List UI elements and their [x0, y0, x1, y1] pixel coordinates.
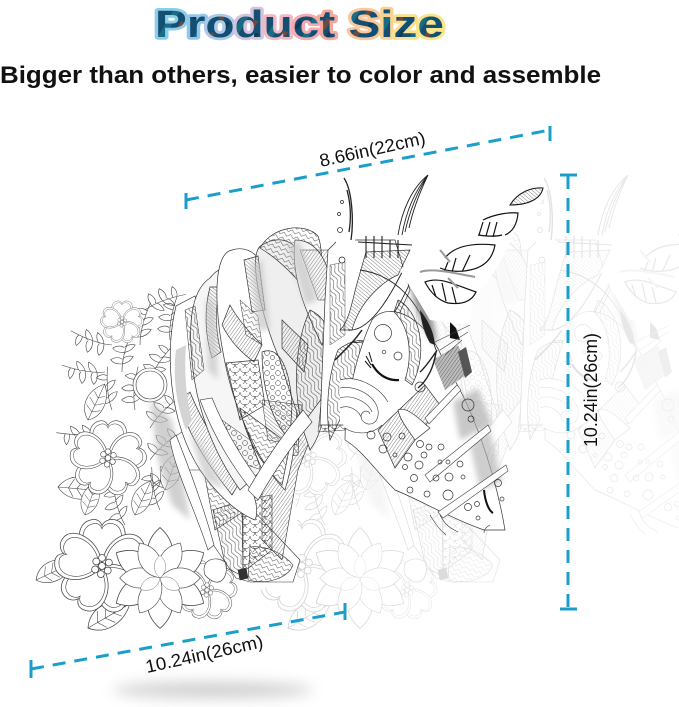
panel: lower mane: [180, 415, 318, 582]
ghost reflection of unicorn: [231, 175, 679, 637]
title: Product Size: [155, 4, 444, 46]
shadow beside mane: [150, 400, 190, 520]
white ribbons: [170, 398, 312, 550]
dimension label: right: 10.24in(26cm): [581, 333, 601, 447]
dark hatched panel: [433, 345, 470, 390]
panel: flower mane: [31, 285, 300, 637]
icon: flowers: [51, 301, 239, 633]
dimension line: top width: [186, 126, 550, 209]
icon: unicorn horn: [400, 187, 545, 325]
icon: leaves and sprigs: [31, 285, 191, 637]
dimension label: top: 8.66in(22cm): [318, 128, 427, 171]
extra mane texture patches: [185, 250, 345, 470]
white strips: [425, 385, 508, 518]
swirl cheek: [340, 378, 388, 435]
panel: mane strands: [170, 228, 345, 550]
icon: ears: [335, 175, 428, 263]
unicorn line art: [31, 175, 545, 637]
dimension line: right height: [560, 175, 577, 609]
panel: face: [340, 262, 508, 535]
soft ribbon shading: [188, 240, 318, 490]
muzzle bubbles: [367, 382, 504, 520]
subtitle: Bigger than others, easier to color and assemble: [0, 62, 601, 89]
icon: closed eye: [365, 324, 402, 380]
ground shadow: [113, 682, 313, 698]
dimension label: bottom: 10.24in(26cm): [144, 631, 265, 677]
dimension line: bottom width: [31, 603, 345, 678]
leaf detail by eye: [418, 351, 437, 388]
panel: neck and forelock: [320, 236, 414, 440]
grey shaded muzzle panels: [453, 388, 502, 490]
dark fold shadows: [408, 262, 472, 378]
